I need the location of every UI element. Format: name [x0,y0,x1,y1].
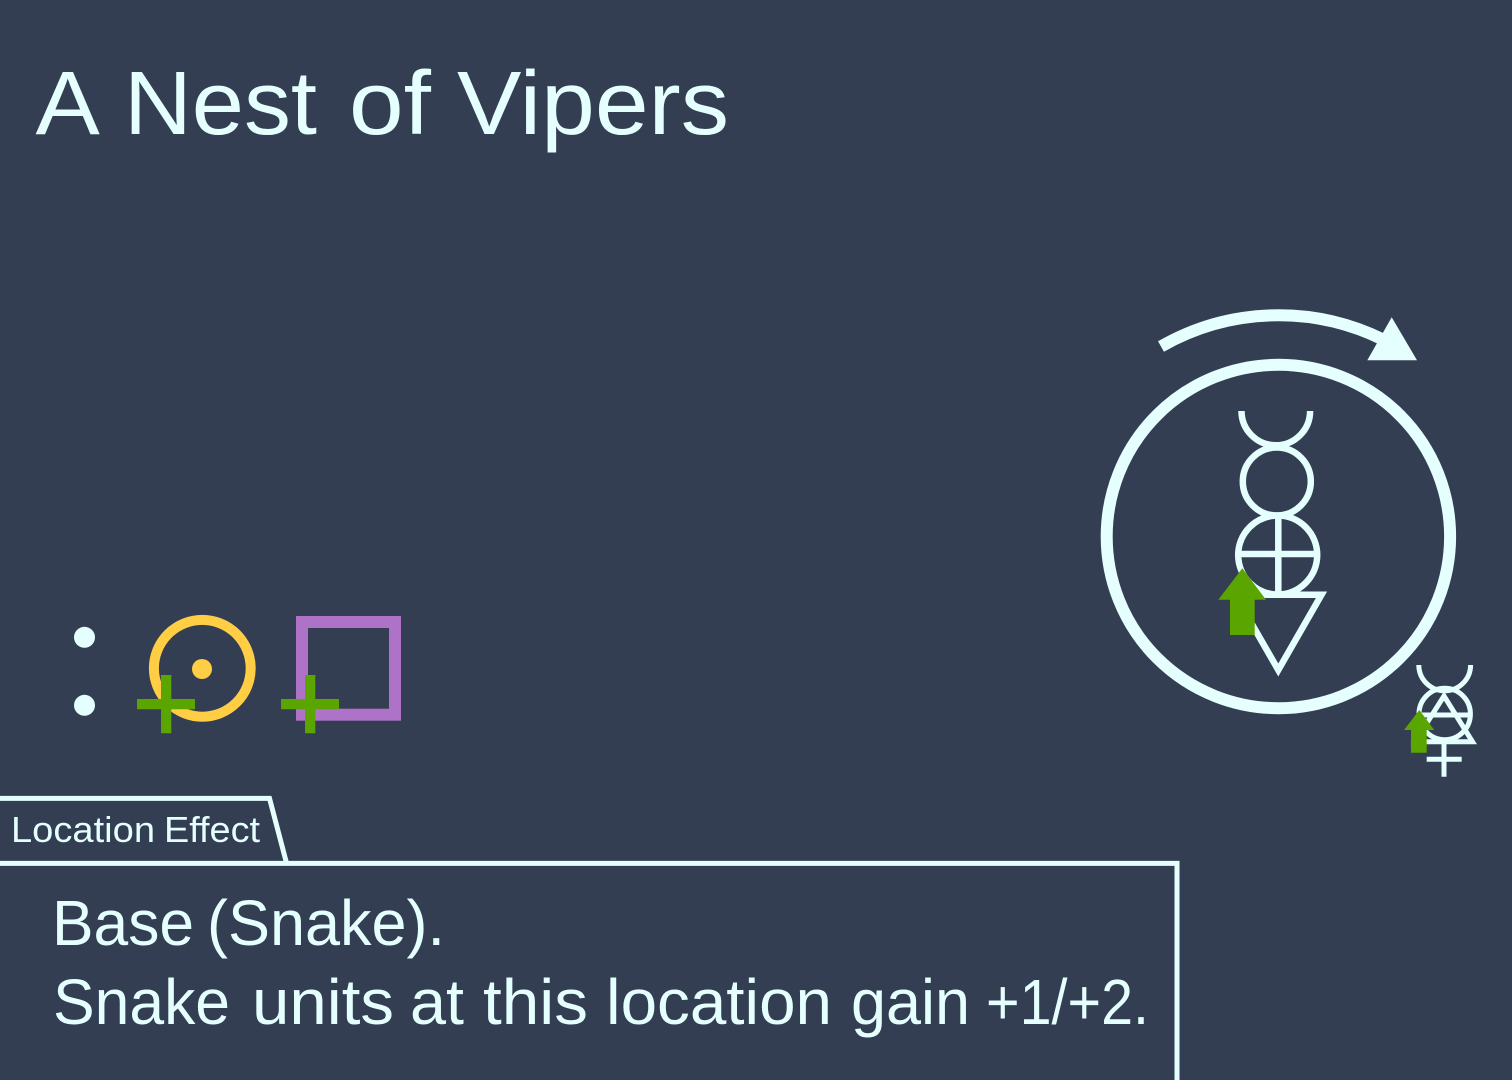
panel: rotating location symbol [1107,315,1450,708]
effect text: units [252,966,394,1038]
arrow: small green up arrow [1404,710,1434,753]
arrow: large green up arrow [1218,568,1266,635]
effect text: gain [851,966,970,1038]
title: A [36,54,100,154]
panel: small alchemical symbol [1404,665,1472,777]
icon: green plus on circle [137,675,195,733]
tab: location effect [0,798,286,863]
title: Vipers [457,54,729,154]
panel: cost icons [74,620,395,733]
icon: colon dots [74,627,95,716]
arrow: clockwise rotation [1161,315,1417,360]
effect text: +1/+2. [986,966,1149,1038]
effect text: at [410,966,464,1038]
tab label: Location [11,809,155,850]
panel: location effect [0,798,1177,1080]
tab label: Effect [164,809,260,850]
effect box outline [0,863,1177,1080]
icon: green plus on square [281,675,339,733]
large ring [1107,365,1450,708]
icon: small stacked symbol [1415,665,1472,777]
icon: yellow circle with dot [154,620,251,717]
effect text: this [483,966,588,1038]
effect text: Snake [53,966,230,1038]
icon: large stacked alchemical symbol [1235,411,1322,670]
title: Nest [124,54,317,154]
effect text [52,887,1149,1038]
title: of [349,54,432,154]
icon: purple square [302,622,395,715]
effect text: (Snake). [207,887,445,959]
effect text: Base [52,887,194,959]
effect text: location [606,966,832,1038]
